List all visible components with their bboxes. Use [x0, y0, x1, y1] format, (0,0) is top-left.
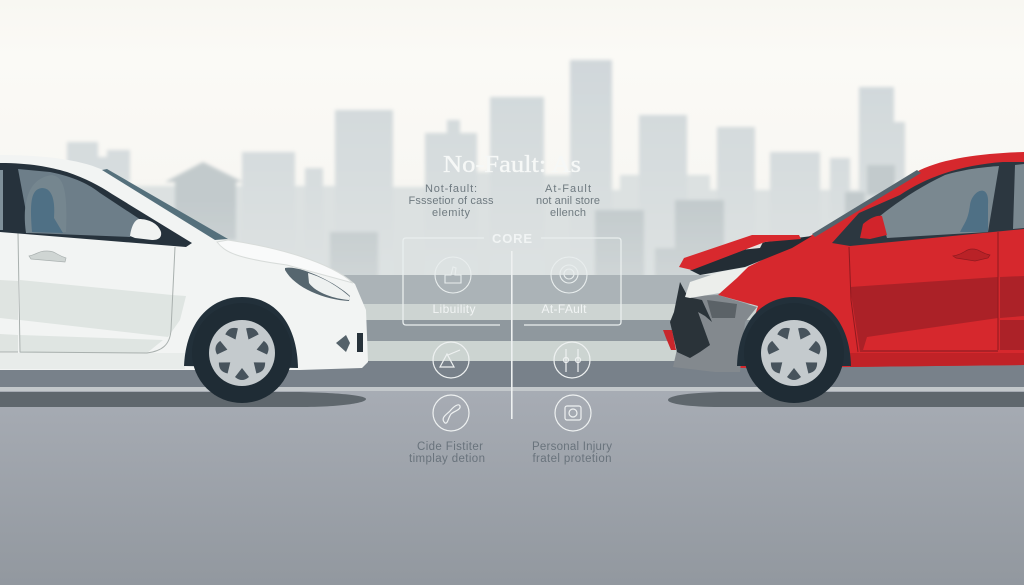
- red car mirror: [860, 216, 887, 239]
- red car windscreen edge: [812, 170, 921, 237]
- red car door lines: [849, 232, 998, 352]
- title: No-Fault: As: [443, 152, 581, 178]
- liability label: Libuility: [432, 302, 476, 316]
- red car wheel arch: [737, 297, 851, 366]
- white car body: [0, 155, 368, 370]
- no-fault description: [408, 183, 494, 219]
- white car shadow: [0, 392, 366, 407]
- no-fault description: Not-fault:: [425, 183, 477, 195]
- red car broken bumper piece: [663, 330, 676, 350]
- red car crumpled front: [673, 295, 757, 372]
- icon: warning triangle: [433, 342, 469, 378]
- white car hub: [209, 320, 275, 386]
- right column caption: fratel protetion: [532, 453, 612, 465]
- white car driver silhouette: [31, 188, 63, 233]
- at-fault label: At-FAult: [542, 302, 587, 316]
- red car door handle: [953, 249, 990, 261]
- red car shadow: [668, 392, 1024, 407]
- red car driver silhouette: [960, 191, 988, 232]
- red car: [663, 152, 1024, 403]
- at-fault description: ellench: [550, 207, 586, 219]
- white car wheel arch: [184, 297, 298, 368]
- red car dark bumper patch: [707, 300, 737, 318]
- red car hub: [761, 320, 827, 386]
- right column caption: Personal Injury: [532, 441, 612, 453]
- icon: at-fault clock: [551, 257, 587, 293]
- icon: liability thumb: [435, 257, 471, 293]
- no-fault description: Fsssetior of cass: [408, 195, 494, 207]
- red car window frame: [832, 162, 1024, 246]
- red car headlight: [685, 267, 748, 298]
- left column caption: timplay detion: [409, 453, 485, 465]
- no-fault description: elemity: [432, 207, 470, 219]
- at-fault description: [536, 183, 600, 219]
- white car mirror: [130, 219, 161, 240]
- left column caption: Cide Fistiter: [417, 441, 483, 453]
- white car tyre: [192, 303, 292, 403]
- red car window glass: [880, 166, 999, 238]
- red car bent hood: [679, 235, 801, 270]
- road and lane bands: [0, 275, 1024, 585]
- left column caption: [409, 441, 485, 465]
- white car: [0, 155, 368, 403]
- white car door shading: [20, 280, 186, 337]
- white car door lines: [0, 233, 175, 353]
- icon: link curve: [433, 395, 469, 431]
- red car hood underside: [690, 236, 812, 275]
- icon: camera protection: [555, 395, 591, 431]
- centre divider: [511, 251, 513, 419]
- white car window glass: [18, 169, 141, 237]
- city skyline: [67, 60, 905, 280]
- at-fault description: At-Fault: [545, 183, 591, 195]
- white car seat highlight: [25, 175, 66, 233]
- core heading: CORE: [492, 231, 532, 246]
- red car exposed engine: [670, 282, 712, 358]
- icon: adjusters: [554, 342, 590, 378]
- white car hood panel: [217, 240, 353, 283]
- red car body: [718, 152, 1024, 368]
- white car grille: [357, 333, 363, 352]
- white car fog light: [336, 335, 350, 352]
- white car headlight: [285, 268, 350, 301]
- white car window frame: [0, 163, 192, 247]
- right column caption: [532, 441, 612, 465]
- white car door handle: [29, 251, 66, 262]
- red car tyre: [744, 303, 844, 403]
- at-fault description: not anil store: [536, 195, 600, 207]
- white car wiper strip: [102, 169, 228, 240]
- red car door shading: [850, 277, 998, 352]
- core box outline: [403, 238, 621, 325]
- background sky: [0, 0, 1024, 285]
